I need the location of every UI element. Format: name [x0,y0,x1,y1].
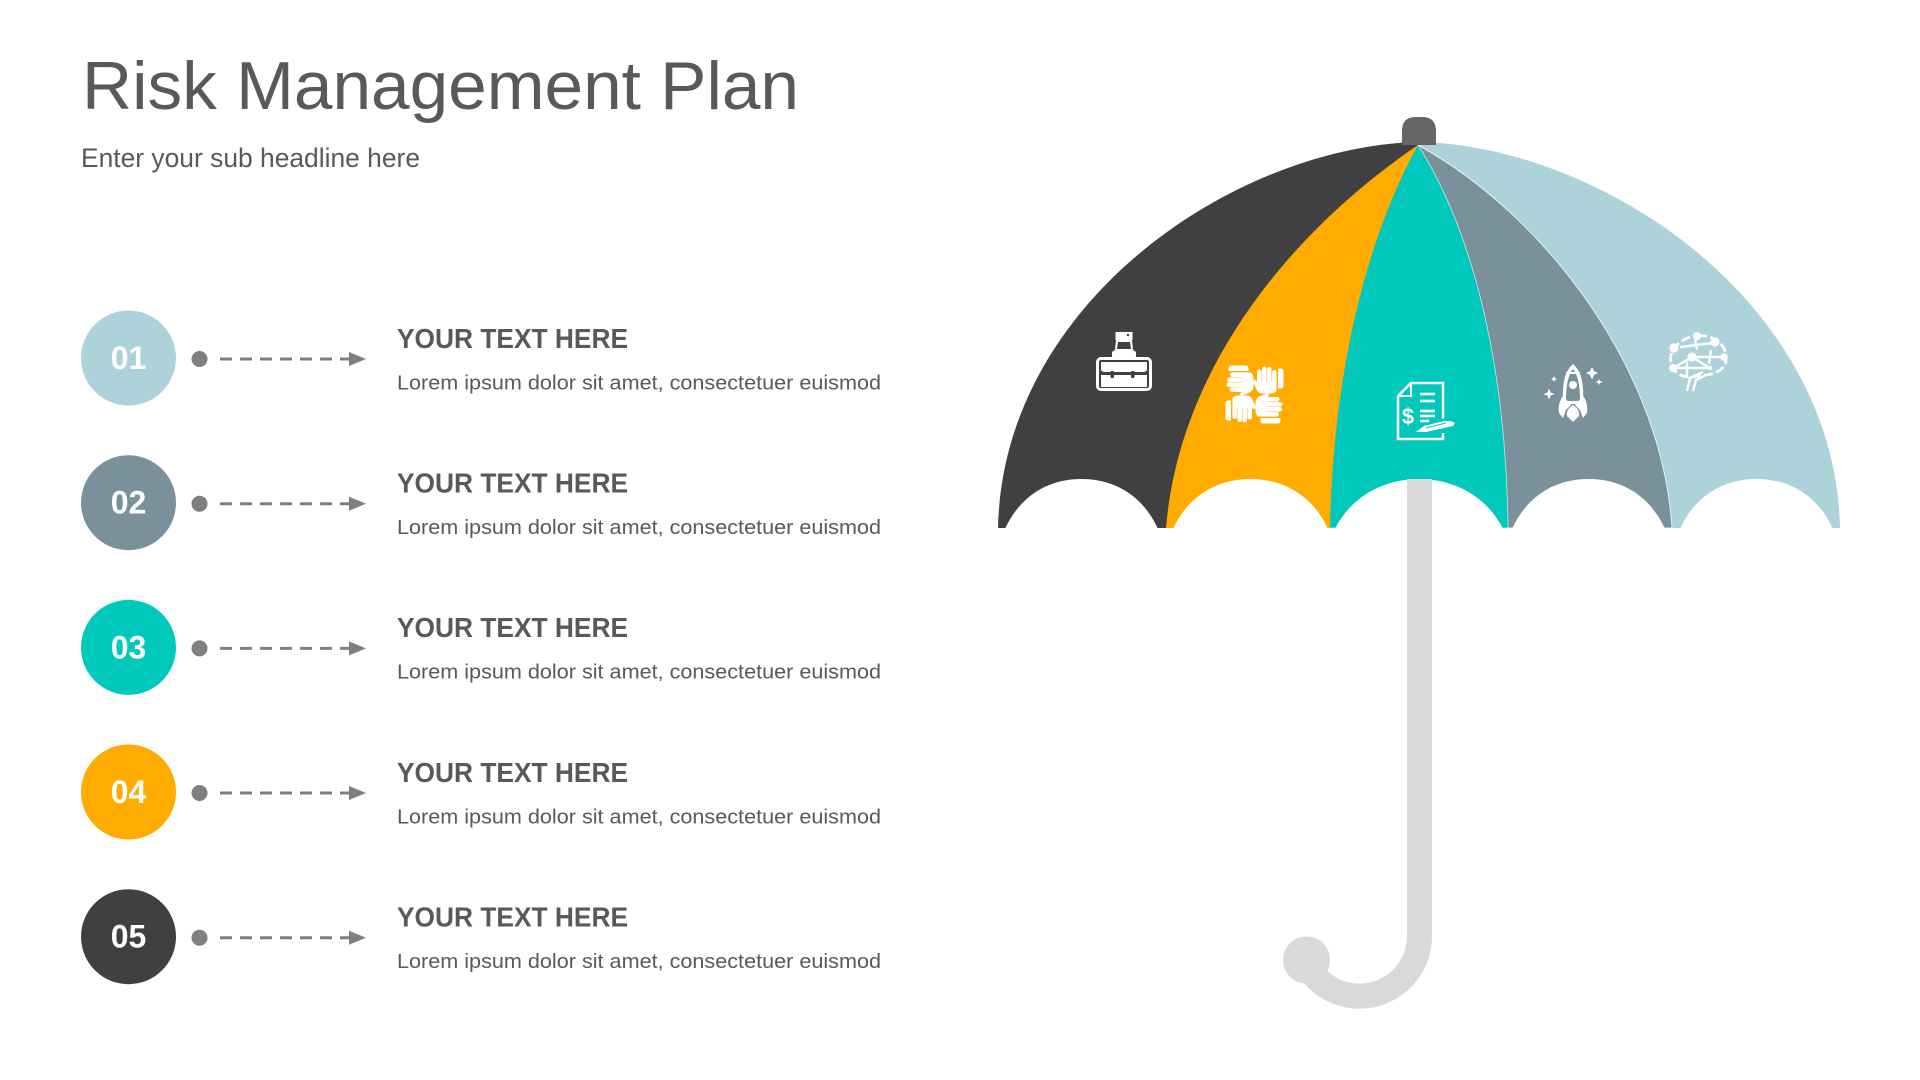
arrow 05 [192,930,366,946]
arrow 04 [192,785,366,801]
number badge 05 [81,889,176,984]
umbrella canopy [990,135,1850,530]
canopy panel: slate [1000,140,1672,528]
heading 01: YOUR TEXT HERE [397,323,628,354]
heading 04: YOUR TEXT HERE [397,757,628,788]
list item 03 [81,600,881,695]
canopy scallops [1005,479,1833,529]
icon: rocket with stars [1544,364,1602,422]
number badge 02: 02 [111,485,146,521]
body text 02: Lorem ipsum dolor sit amet, consectetuer euismod [397,516,881,539]
canopy panel: orange [1000,140,1418,528]
arrow 02 [192,496,366,512]
canopy panel: dark [990,135,1418,528]
icon: four joined hands [1226,366,1284,424]
body text 05: Lorem ipsum dolor sit amet, consectetuer euismod [397,950,881,973]
icon: financial document with pen: $ [1402,404,1414,429]
list item 05 [81,889,881,984]
number badge 02 [81,455,176,550]
umbrella [990,117,1850,996]
number badge 04: 04 [111,774,146,810]
canopy panel: light blue [990,135,1850,530]
list item 04 [81,744,881,840]
number badge 04 [81,744,176,840]
list item 02 [81,455,881,550]
number badge 01 [81,310,176,406]
body text 01: Lorem ipsum dolor sit amet, consectetuer euismod [397,372,881,394]
heading 05: YOUR TEXT HERE [397,901,628,932]
arrow 03 [192,640,366,656]
heading 03: YOUR TEXT HERE [397,612,628,643]
body text 04: Lorem ipsum dolor sit amet, consectetuer euismod [397,805,881,828]
icon: brain network [1669,332,1728,391]
list item 01 [81,310,881,406]
umbrella cap [1402,117,1436,145]
icon: briefcase in hand [1098,332,1150,390]
subtitle: Enter your sub headline here [81,143,420,173]
canopy panel: teal [1000,140,1508,528]
icon: financial document with pen [1398,383,1455,439]
number badge 03 [81,600,176,695]
arrow 01 [192,351,366,367]
title: Risk Management Plan [82,48,799,124]
heading 02: YOUR TEXT HERE [397,468,628,499]
umbrella handle [1283,479,1420,996]
number badge 03: 03 [111,629,146,665]
number badge 05: 05 [111,919,146,955]
number badge 01: 01 [111,340,146,376]
body text 03: Lorem ipsum dolor sit amet, consectetuer euismod [397,661,881,684]
